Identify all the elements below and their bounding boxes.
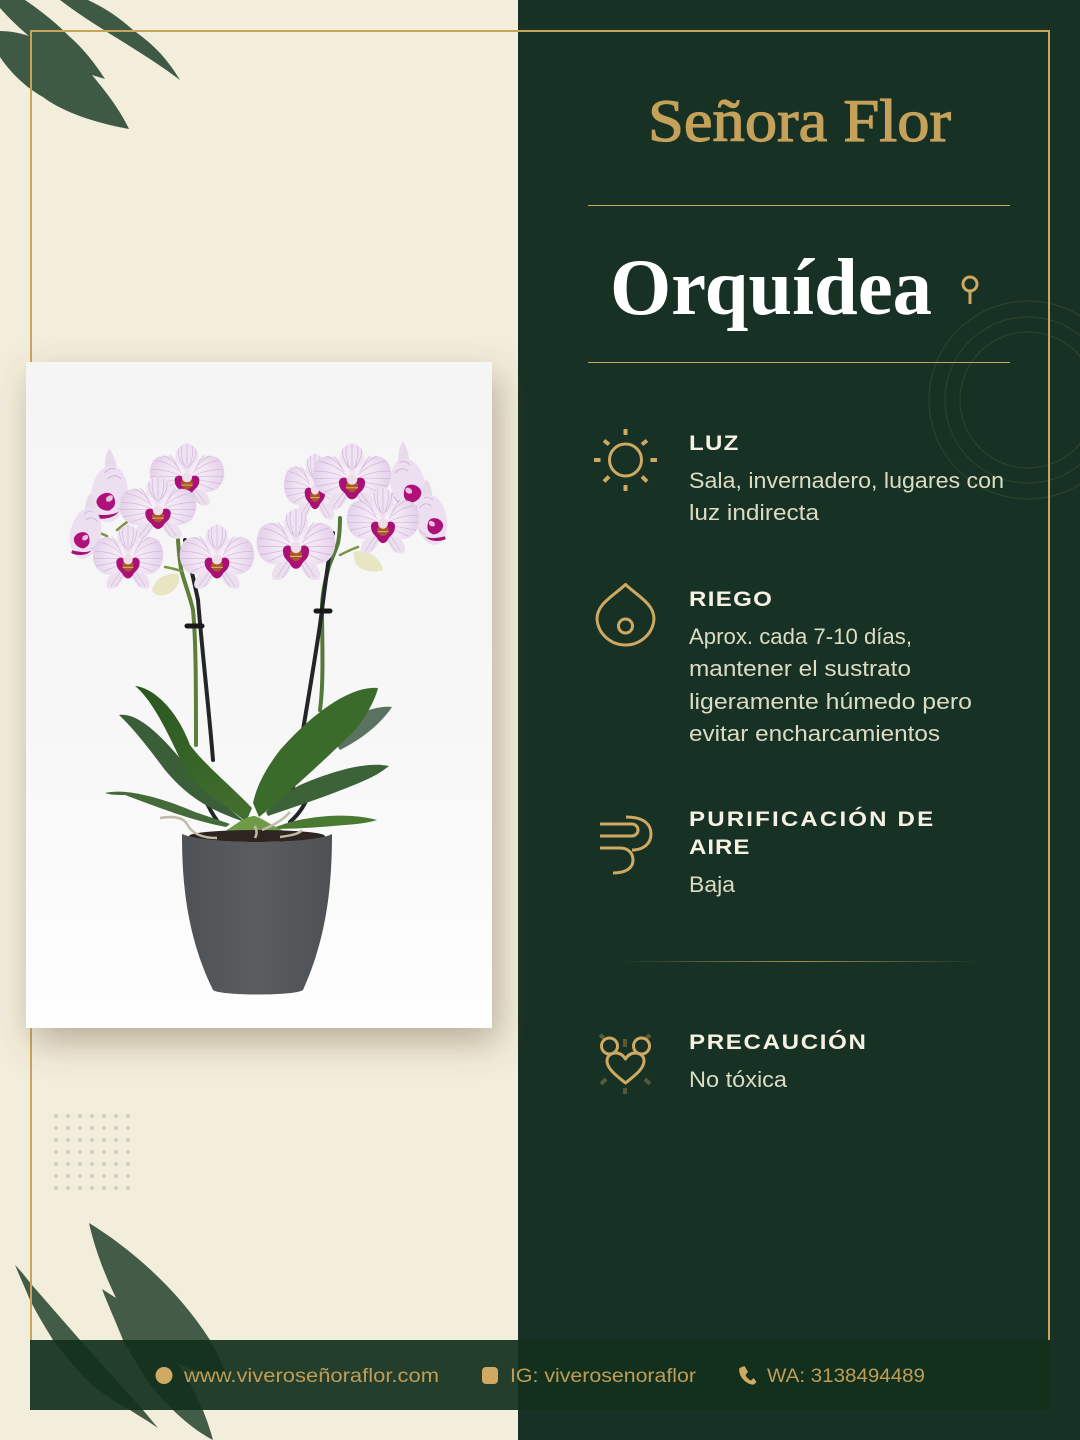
purificacion label: AIRE — [689, 834, 749, 859]
section: purificacion de aire — [600, 806, 933, 897]
riego description: ligeramente húmedo pero — [689, 689, 972, 714]
decorative leaves top left — [0, 0, 180, 129]
photo: potted orchid — [26, 362, 492, 1028]
icon: pin — [963, 277, 977, 304]
footer bar — [30, 1340, 1050, 1410]
riego label: RIEGO — [689, 586, 772, 611]
second divider — [588, 362, 1010, 363]
section: precaucion — [600, 1029, 866, 1094]
luz label: LUZ — [689, 430, 738, 455]
pale buds — [152, 574, 179, 595]
orchid leaves — [105, 686, 392, 840]
luz description: luz indirecta — [689, 500, 820, 525]
purificacion label — [689, 806, 933, 859]
decorative leaves bottom left — [15, 1223, 230, 1440]
cream left background — [0, 0, 518, 1440]
icon: heart with paws — [600, 1035, 650, 1094]
icon: water drop — [597, 584, 654, 645]
precaucion value: No tóxica — [689, 1067, 788, 1092]
grey pot — [182, 834, 332, 994]
dot grid decoration — [54, 1114, 130, 1190]
soil and roots — [160, 812, 325, 842]
orchid flowers — [65, 442, 452, 595]
website contact: www.viveroseñoraflor.com — [183, 1366, 439, 1387]
precaucion label: PRECAUCIÓN — [689, 1029, 866, 1054]
riego description — [689, 624, 972, 746]
icon: sun — [594, 429, 657, 491]
concentric decorative circles — [929, 301, 1080, 499]
riego description: evitar encharcamientos — [689, 721, 940, 746]
plant name heading: Orquídea — [610, 244, 932, 332]
instagram contact: IG: viverosenoraflor — [510, 1366, 697, 1387]
purificacion label: PURIFICACIÓN DE — [689, 806, 933, 831]
purificacion value: Baja — [689, 872, 735, 897]
section: riego — [597, 584, 972, 746]
brand heading: Señora Flor — [648, 88, 951, 154]
dark green right panel — [518, 0, 1080, 1440]
whatsapp contact: WA: 3138494489 — [767, 1366, 925, 1387]
stems and stakes — [93, 488, 425, 822]
riego description: mantener el sustrato — [689, 656, 911, 681]
luz description — [689, 468, 1004, 525]
fading divider — [620, 961, 980, 962]
section: luz — [594, 429, 1004, 525]
luz description: Sala, invernadero, lugares con — [689, 468, 1004, 493]
photo background — [26, 362, 492, 1028]
icon: wind — [600, 817, 651, 873]
riego description: Aprox. cada 7-10 días, — [689, 624, 912, 649]
top divider — [588, 205, 1010, 206]
